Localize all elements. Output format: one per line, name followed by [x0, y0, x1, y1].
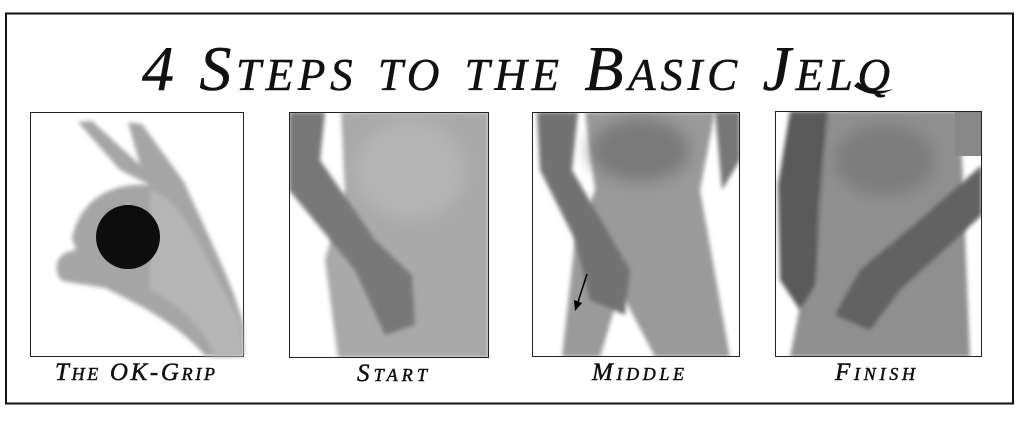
icon: dark circle inside grip [96, 205, 160, 269]
panel: finish [775, 111, 982, 357]
arrow: downward motion [574, 274, 587, 311]
tonal placeholder: finish photo [776, 111, 982, 357]
icon: hand forming OK grip [56, 121, 243, 356]
tonal placeholder: middle photo [532, 112, 740, 357]
tonal placeholder: start photo [289, 112, 489, 358]
caption: middle: Middle [591, 359, 684, 386]
caption: start: Start [357, 360, 429, 387]
caption: the OK-grip: The OK-Grip [55, 359, 215, 386]
panel: start [289, 112, 489, 358]
panel: the OK-grip [30, 112, 244, 356]
title: 4 Steps to the Basic Jelq [142, 33, 890, 104]
panel: middle [532, 112, 740, 357]
caption: finish: Finish [834, 359, 916, 386]
